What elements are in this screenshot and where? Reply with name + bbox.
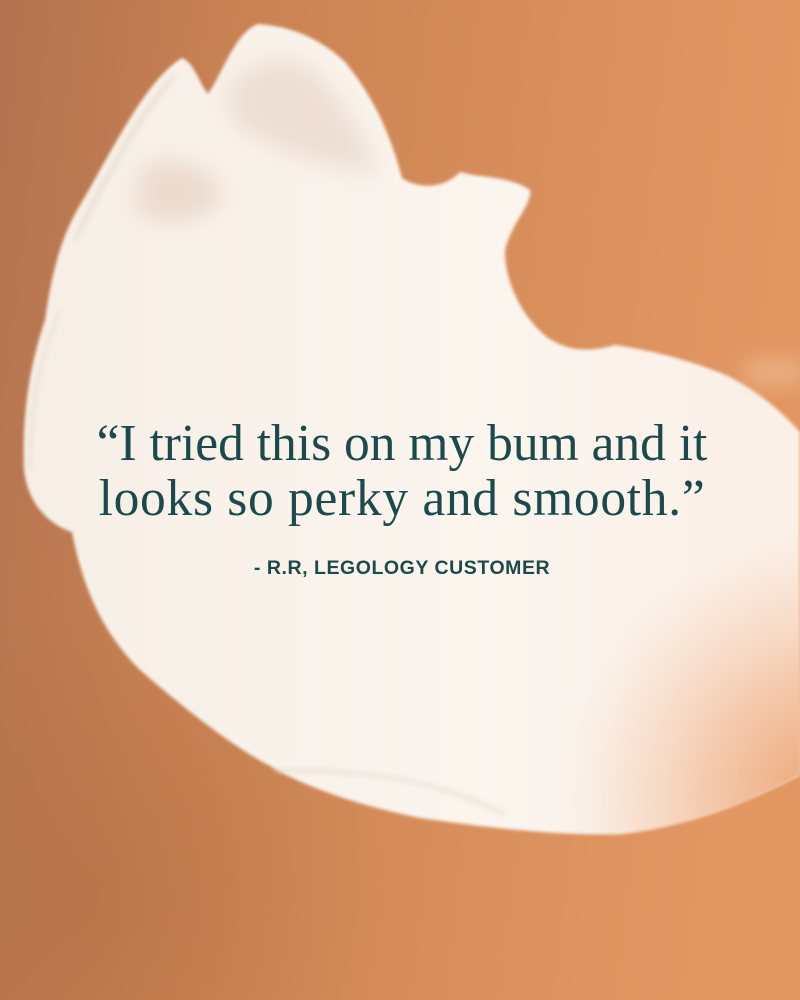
quote line 2: looks so perky and smooth.” bbox=[99, 470, 705, 527]
right-side fade of swatch into skin bbox=[420, 432, 800, 834]
attribution: - R.R, LEGOLOGY CUSTOMER bbox=[254, 557, 550, 579]
quote line 1: “I tried this on my bum and it bbox=[97, 415, 707, 472]
cream swatch bbox=[24, 24, 800, 834]
shine on skin bbox=[741, 358, 800, 386]
